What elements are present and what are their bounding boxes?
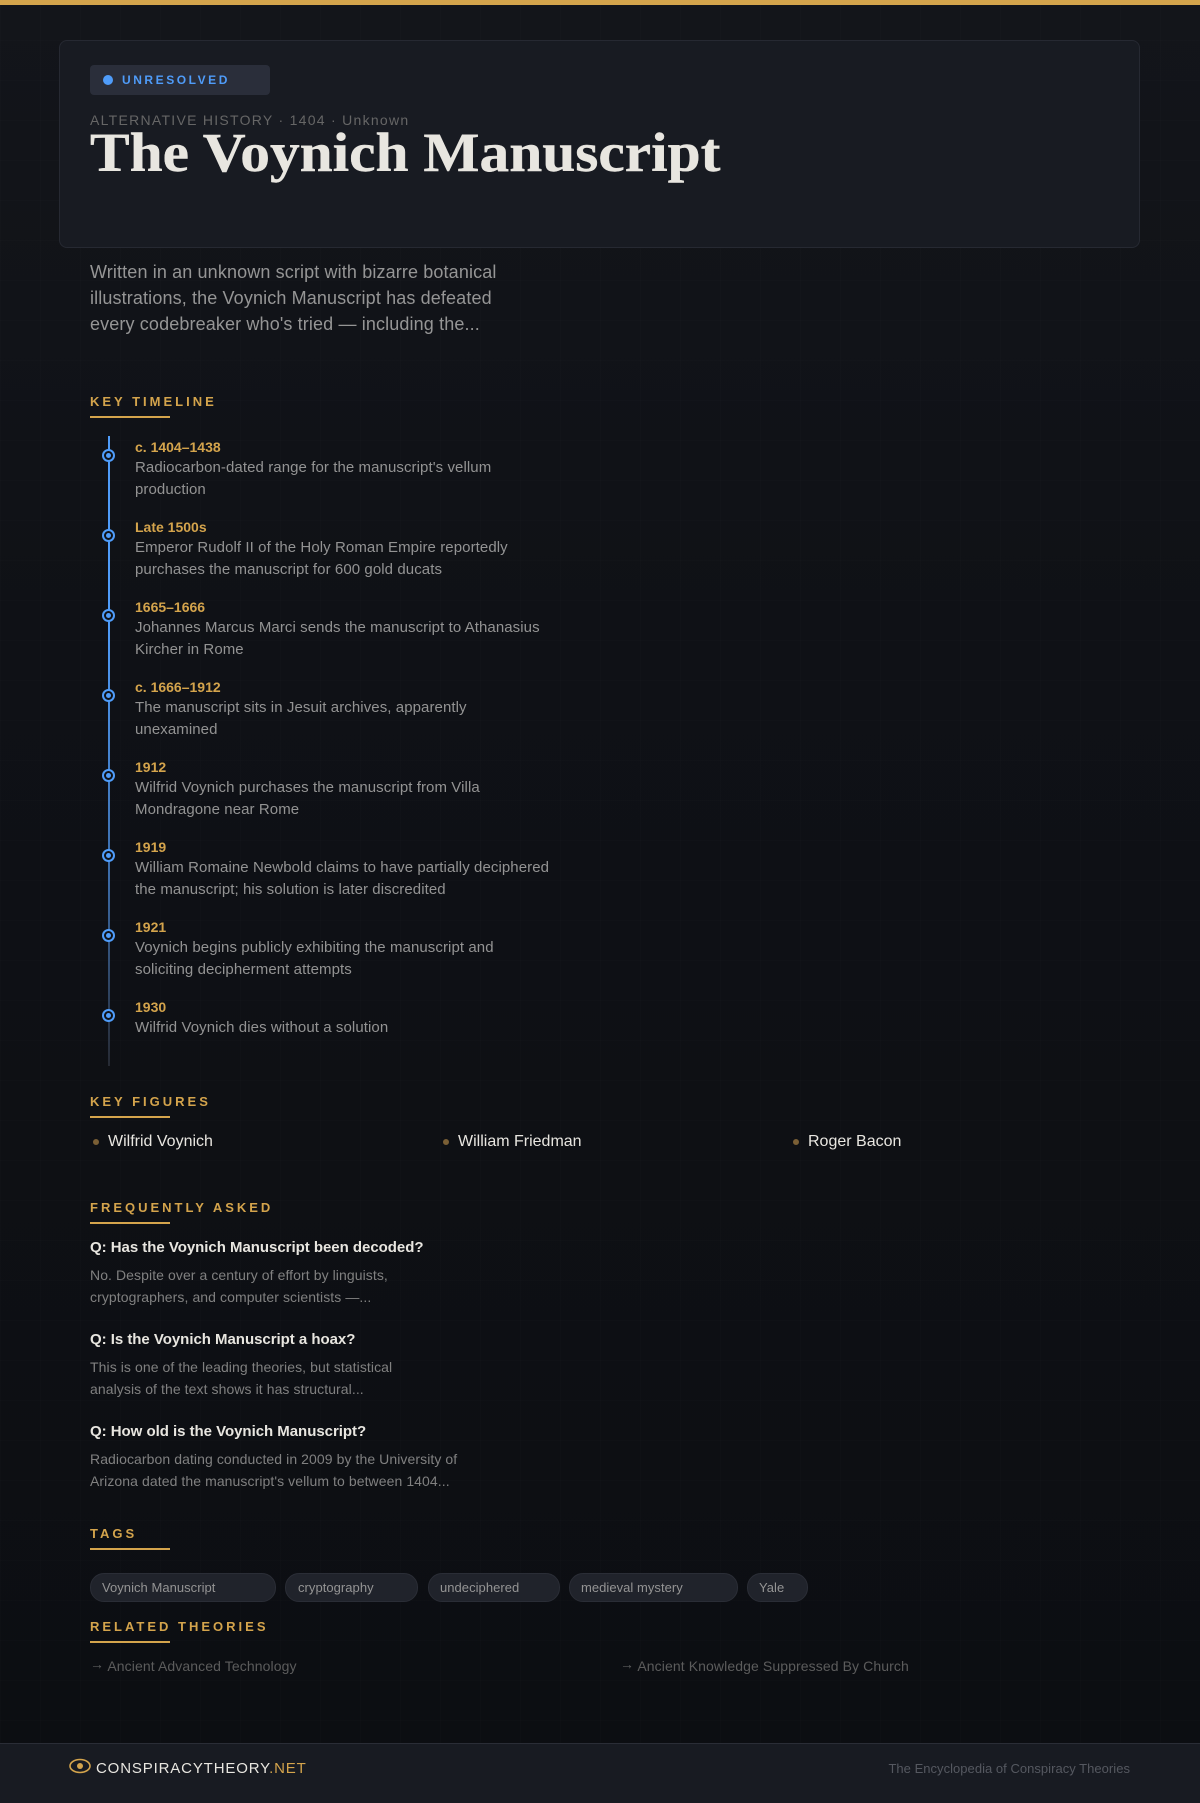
text: 1930 bbox=[135, 999, 166, 1015]
text: William Friedman bbox=[458, 1133, 582, 1150]
section heading: frequently asked: FREQUENTLY ASKED bbox=[90, 1200, 273, 1215]
text: 1919 bbox=[135, 839, 166, 855]
text: The manuscript sits in Jesuit archives, apparently bbox=[135, 699, 467, 716]
tag: Yale bbox=[747, 1573, 808, 1602]
faq answer 2: This is one of the leading theories, but statistical bbox=[90, 1359, 392, 1375]
text: Wilfrid Voynich bbox=[108, 1133, 213, 1150]
faq question 2: Q: Is the Voynich Manuscript a hoax? bbox=[90, 1331, 355, 1348]
faq answer 1: cryptographers, and computer scientists —... bbox=[90, 1289, 371, 1305]
timeline event: c. 1404–1438 bbox=[102, 449, 115, 462]
text: Late 1500s bbox=[135, 519, 207, 535]
faq answer 2 bbox=[90, 1359, 392, 1397]
timeline event: 1665–1666 bbox=[102, 609, 115, 622]
timeline event: 1919 bbox=[102, 849, 115, 862]
key figure: William Friedman bbox=[443, 1139, 449, 1145]
title: The Voynich Manuscript bbox=[90, 122, 720, 183]
text: Voynich begins publicly exhibiting the manuscript and bbox=[135, 939, 494, 956]
timeline event: Late 1500s bbox=[102, 529, 115, 542]
tag: cryptography bbox=[285, 1573, 418, 1602]
top accent bar bbox=[0, 0, 1200, 5]
tag: undeciphered bbox=[428, 1573, 560, 1602]
tag: Voynich Manuscript: Voynich Manuscript bbox=[102, 1580, 215, 1595]
summary text bbox=[90, 262, 496, 334]
timeline event: 1930 bbox=[102, 1009, 115, 1022]
timeline event: c. 1666–1912 bbox=[102, 689, 115, 702]
text: c. 1666–1912 bbox=[135, 679, 221, 695]
text: unexamined bbox=[135, 721, 218, 738]
text: Radiocarbon-dated range for the manuscript's vellum bbox=[135, 459, 491, 476]
tag: Yale: Yale bbox=[759, 1580, 784, 1595]
faq answer 3 bbox=[90, 1451, 458, 1489]
summary text: every codebreaker who's tried — including the... bbox=[90, 314, 480, 334]
tag: cryptography: cryptography bbox=[298, 1580, 374, 1595]
key figure: Wilfrid Voynich bbox=[93, 1139, 99, 1145]
text: Johannes Marcus Marci sends the manuscript to Athanasius bbox=[135, 619, 540, 636]
text: production bbox=[135, 481, 206, 498]
text: Kircher in Rome bbox=[135, 641, 244, 658]
timeline event: 1921 bbox=[102, 929, 115, 942]
faq answer 3: Arizona dated the manuscript's vellum to between 1404... bbox=[90, 1473, 450, 1489]
text: William Romaine Newbold claims to have partially deciphered bbox=[135, 859, 549, 876]
section heading: related theories: RELATED THEORIES bbox=[90, 1619, 268, 1634]
tag: medieval mystery bbox=[569, 1573, 738, 1602]
text: Mondragone near Rome bbox=[135, 801, 299, 818]
tag: medieval mystery: medieval mystery bbox=[581, 1580, 683, 1595]
timeline spine bbox=[108, 436, 110, 1066]
related theory link 1: → Ancient Advanced Technology bbox=[90, 1656, 297, 1674]
text: 1921 bbox=[135, 919, 166, 935]
summary text: Written in an unknown script with bizarre botanical bbox=[90, 262, 496, 282]
category and date line: ALTERNATIVE HISTORY · 1404 · Unknown bbox=[90, 112, 409, 128]
icon: eye logo bbox=[69, 1758, 91, 1774]
key figure: Roger Bacon bbox=[793, 1139, 799, 1145]
faq answer 1 bbox=[90, 1267, 388, 1305]
summary text: illustrations, the Voynich Manuscript has defeated bbox=[90, 288, 492, 308]
text: Roger Bacon bbox=[808, 1133, 901, 1150]
faq answer 3: Radiocarbon dating conducted in 2009 by the University of bbox=[90, 1451, 457, 1467]
section heading: key timeline: KEY TIMELINE bbox=[90, 394, 217, 409]
text: the manuscript; his solution is later discredited bbox=[135, 881, 446, 898]
faq answer 1: No. Despite over a century of effort by linguists, bbox=[90, 1267, 388, 1283]
related theory link 2: → Ancient Knowledge Suppressed By Church bbox=[620, 1656, 909, 1674]
status badge bbox=[90, 65, 270, 95]
text: c. 1404–1438 bbox=[135, 439, 221, 455]
timeline event: 1912 bbox=[102, 769, 115, 782]
footer brand: CONSPIRACYTHEORY.NET bbox=[96, 1760, 307, 1777]
faq question 1: Q: Has the Voynich Manuscript been decoded? bbox=[90, 1239, 424, 1256]
faq question 3: Q: How old is the Voynich Manuscript? bbox=[90, 1423, 366, 1440]
icon: status dot bbox=[103, 75, 113, 85]
text: purchases the manuscript for 600 gold ducats bbox=[135, 561, 442, 578]
text: Emperor Rudolf II of the Holy Roman Empire reportedly bbox=[135, 539, 508, 556]
text: soliciting decipherment attempts bbox=[135, 961, 352, 978]
footer tagline: The Encyclopedia of Conspiracy Theories bbox=[888, 1761, 1130, 1776]
text: 1912 bbox=[135, 759, 166, 775]
text: Wilfrid Voynich purchases the manuscript from Villa bbox=[135, 779, 480, 796]
tag: Voynich Manuscript bbox=[90, 1573, 276, 1602]
tag: undeciphered: undeciphered bbox=[440, 1580, 519, 1595]
section heading: tags: TAGS bbox=[90, 1526, 137, 1541]
footer bbox=[0, 1743, 1200, 1803]
text: 1665–1666 bbox=[135, 599, 205, 615]
section heading: key figures: KEY FIGURES bbox=[90, 1094, 211, 1109]
badge label: UNRESOLVED bbox=[122, 73, 230, 87]
faq answer 2: analysis of the text shows it has structural... bbox=[90, 1381, 364, 1397]
panel: hero header bbox=[59, 40, 1140, 248]
text: Wilfrid Voynich dies without a solution bbox=[135, 1019, 388, 1036]
